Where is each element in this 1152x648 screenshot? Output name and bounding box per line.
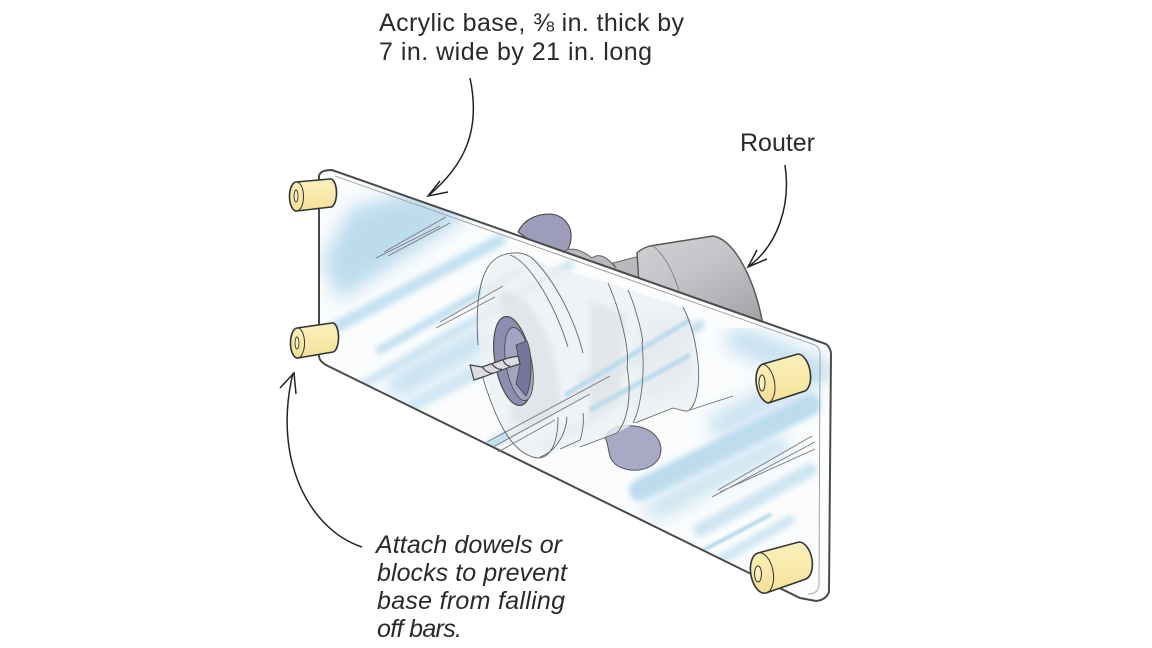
body outline lines bbox=[477, 253, 733, 458]
label: dowels note: Attach dowels or bbox=[374, 531, 564, 559]
label: acrylic base: Acrylic base, ⅜ in. thick by bbox=[379, 9, 684, 37]
knob: lower bbox=[605, 426, 661, 470]
knob: upper bbox=[518, 214, 571, 262]
label: dowels note: off bars. bbox=[377, 615, 462, 643]
drill bit bbox=[470, 356, 520, 380]
plate outline bbox=[319, 170, 831, 601]
router bore bbox=[487, 314, 539, 408]
diagram: acrylic router base bbox=[280, 13, 832, 637]
arrow: to router bbox=[748, 165, 786, 267]
acrylic plate bbox=[320, 186, 830, 564]
dowel: lower right bbox=[750, 542, 812, 593]
label: dowels note: blocks to prevent bbox=[377, 559, 568, 587]
router body seen through base bbox=[470, 252, 733, 458]
body shading bbox=[500, 290, 560, 424]
dowel: top left bbox=[289, 179, 337, 211]
dowel: upper right bbox=[756, 354, 811, 403]
router behind the base bbox=[518, 214, 763, 345]
label: acrylic base: 7 in. wide by 21 in. long bbox=[379, 38, 652, 66]
watercolor washes bbox=[322, 190, 815, 560]
label: dowels note bbox=[374, 531, 568, 643]
arrow: to dowels bbox=[280, 373, 362, 547]
label: router: Router bbox=[740, 129, 815, 157]
plate edge and face bbox=[319, 170, 831, 601]
dowel: middle left bbox=[290, 323, 339, 358]
glare lines bbox=[376, 217, 815, 497]
router motor cap bbox=[637, 236, 763, 345]
label: acrylic base bbox=[379, 9, 684, 66]
body silhouette bbox=[479, 252, 698, 458]
body streaks bbox=[565, 320, 690, 410]
arrow: to acrylic base bbox=[428, 78, 473, 196]
cap shoulder line bbox=[653, 246, 680, 295]
label: dowels note: base from falling bbox=[377, 587, 565, 615]
router neck bbox=[563, 249, 690, 310]
